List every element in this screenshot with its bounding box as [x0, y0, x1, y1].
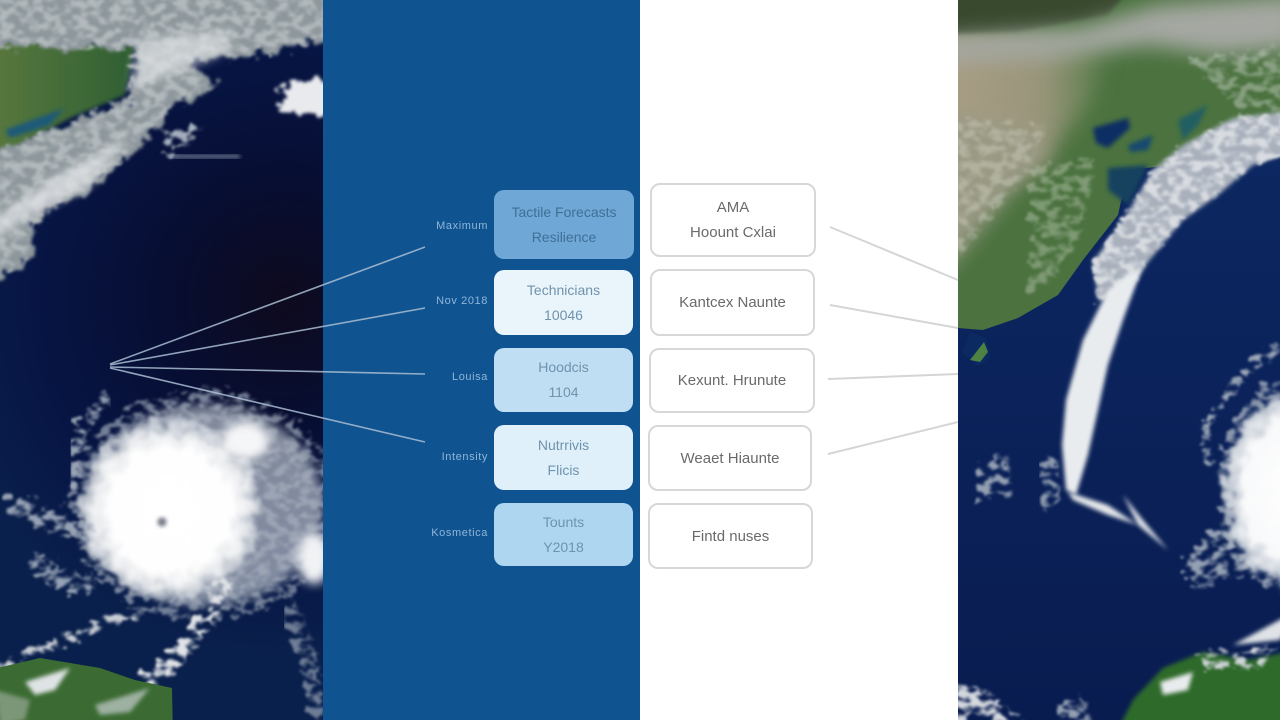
label: row 5: Kosmetica	[431, 527, 488, 539]
clouds: streaks right	[978, 110, 1280, 645]
land: upper right	[938, 0, 1280, 366]
blue card 5: Tounts	[543, 514, 584, 530]
outlined card 1	[650, 183, 816, 257]
outlined card 5	[648, 503, 813, 569]
blue card 1: Resilience	[532, 228, 596, 244]
leader lines: left fan	[110, 246, 426, 443]
blue card 2	[494, 270, 633, 335]
land: lower left	[0, 658, 173, 720]
panel: left satellite image	[0, 0, 323, 720]
blue card 4: Flicis	[548, 462, 579, 478]
label: row 2: Nov 2018	[436, 295, 488, 307]
label: row 3: Louisa	[452, 371, 488, 383]
label: row 4: Intensity	[442, 451, 488, 463]
arc around storm	[1206, 345, 1280, 465]
blue card 4: Nutrrivis	[538, 436, 589, 452]
outlined card 1: AMA	[717, 199, 749, 216]
outlined card 1: Hoount Cxlai	[690, 224, 776, 241]
hurricane: right	[1221, 377, 1280, 593]
blue card 3: 1104	[548, 384, 579, 400]
clouds: upper band	[0, 0, 340, 295]
spiral arms	[0, 400, 318, 710]
hurricane: left	[0, 390, 340, 710]
panel: white column	[640, 0, 958, 720]
blue card 1: Tactile Forecasts	[511, 204, 617, 220]
blue card 5	[494, 503, 633, 566]
island	[962, 332, 990, 366]
blue card 1	[494, 190, 634, 259]
blue card 3: Hoodcis	[538, 359, 589, 375]
blue card 2: Technicians	[527, 282, 600, 298]
water: bays	[1093, 118, 1130, 148]
blue card 2: 10046	[544, 306, 583, 322]
outlined card 4: Weaet Hiaunte	[681, 450, 779, 466]
outlined card 4	[648, 425, 812, 491]
land: upper left	[0, 40, 135, 170]
outlined card 3: Kexunt. Hrunute	[678, 372, 786, 389]
outlined card 5: Fintd nuses	[692, 528, 769, 544]
outlined card 2: Kantcex Naunte	[679, 294, 786, 311]
panel: right satellite image	[958, 0, 1280, 720]
outlined card 3	[649, 348, 815, 413]
blue card 4	[494, 425, 633, 490]
panel: central blue column	[323, 0, 640, 720]
water: inlet upper left	[5, 108, 65, 138]
blue card 3	[494, 348, 633, 412]
label: row 1: Maximum	[436, 220, 488, 232]
outlined card 2	[650, 269, 815, 336]
blue card 5: Y2018	[543, 538, 584, 554]
land: lower right	[938, 645, 1280, 720]
leader lines: right connectors	[828, 226, 958, 455]
